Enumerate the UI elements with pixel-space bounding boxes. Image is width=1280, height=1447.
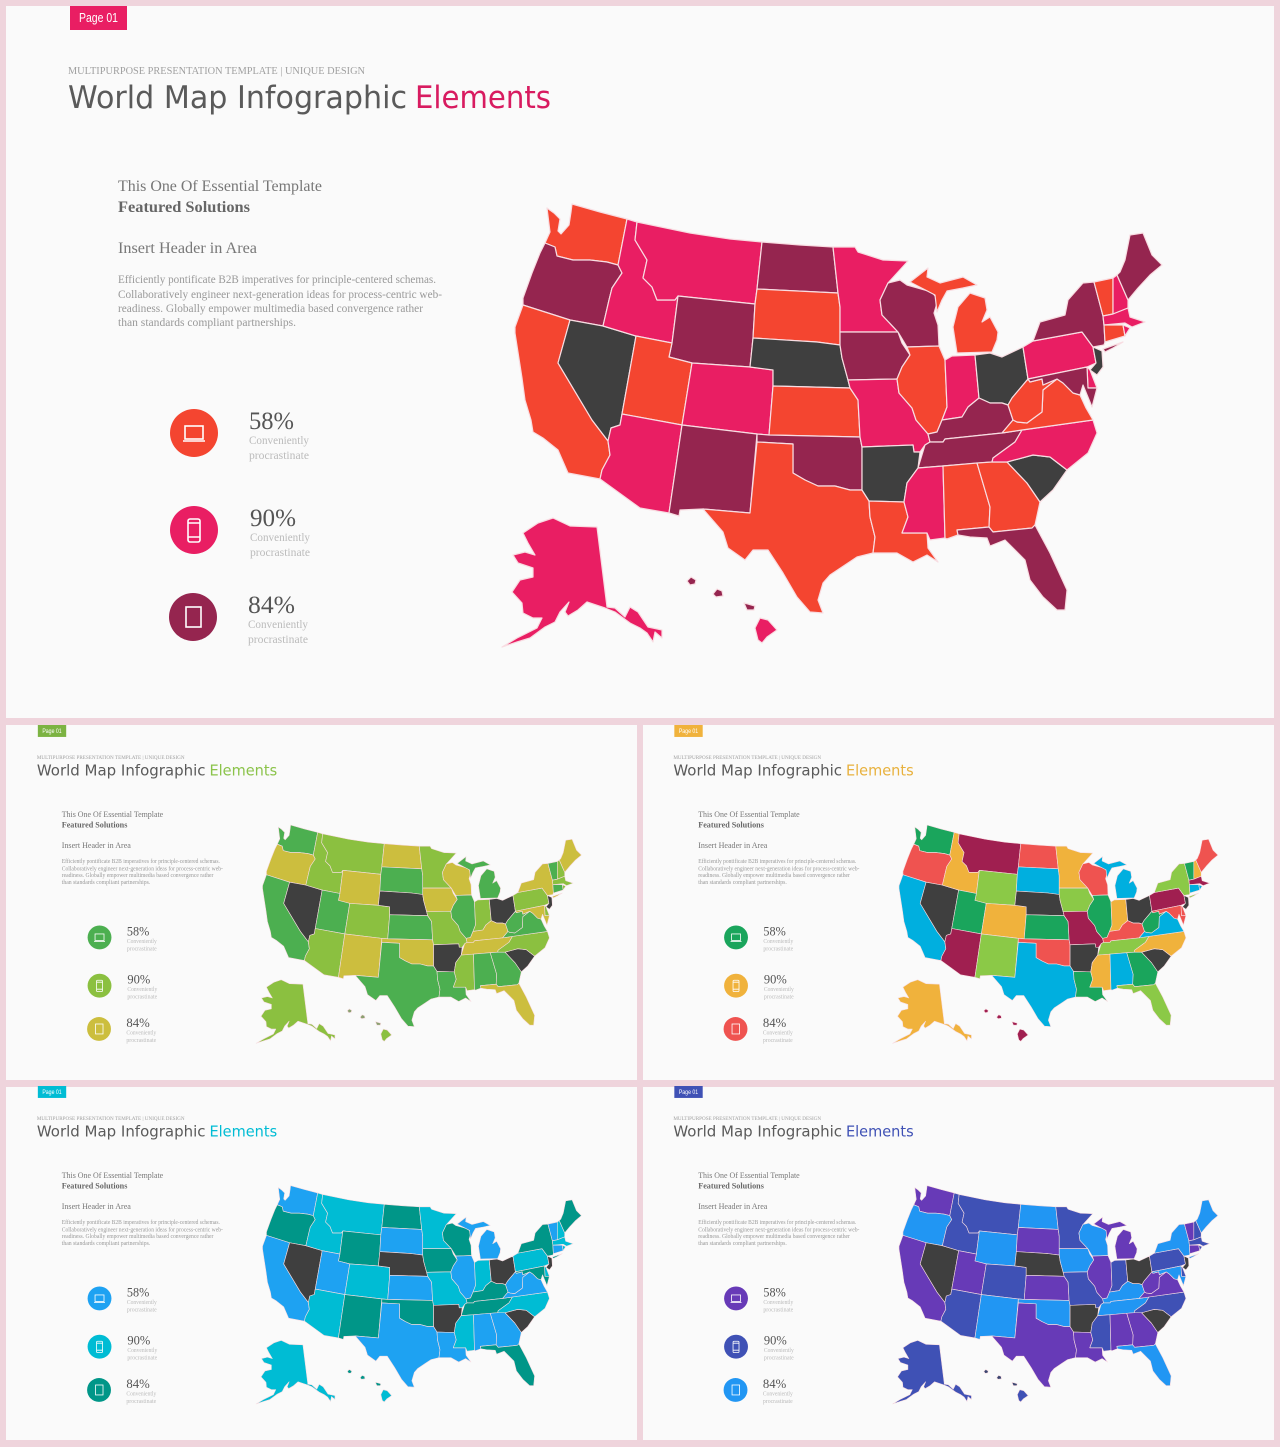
stat: 58% laptop: procrastinate [127,946,157,952]
page tag [674,1086,703,1098]
stat: 84% tablet [87,1377,157,1405]
title: World Map Infographic [37,762,205,780]
intro text: Featured Solutions [698,1181,764,1190]
paragraph: Collaboratively engineer next-generation ideas for process-centric web- [62,1226,223,1233]
stat: 58% laptop: procrastinate [763,1307,794,1313]
eyebrow: MULTIPURPOSE PRESENTATION TEMPLATE | UNIQUE DESIGN [68,65,365,77]
eyebrow: MULTIPURPOSE PRESENTATION TEMPLATE | UNIQUE DESIGN [37,755,185,761]
page tag: Page 01 [42,1089,62,1096]
paragraph: Collaboratively engineer next-generation ideas for process-centric web- [118,289,442,301]
stat: 58% laptop: Conveniently [763,939,793,945]
stat: 84% tablet [87,1016,157,1044]
paragraph [698,1219,860,1247]
stat: 84% tablet: Conveniently [248,619,308,631]
stat: 58% laptop [724,1285,794,1313]
stat: 58% laptop: 58% [127,1285,149,1299]
eyebrow: MULTIPURPOSE PRESENTATION TEMPLATE | UNIQUE DESIGN [673,755,821,761]
stat: 58% laptop: 58% [763,924,786,938]
page tag [38,725,66,737]
paragraph [62,858,223,886]
intro text: Insert Header in Area [698,841,768,850]
title: World Map Infographic [68,80,407,116]
stat: 90% phone [170,505,310,559]
intro text: Insert Header in Area [698,1202,768,1211]
title: World Map Infographic [673,762,842,780]
paragraph: Collaboratively engineer next-generation ideas for process-centric web- [62,865,223,872]
stat: 90% phone: procrastinate [764,995,794,1001]
stat: 90% phone: procrastinate [764,1356,794,1362]
stat: 84% tablet: procrastinate [126,1038,157,1044]
paragraph: than standards compliant partnerships. [698,880,787,886]
paragraph: than standards compliant partnerships. [118,317,296,329]
map: USA violet [893,1186,1218,1404]
stat: 58% laptop: Conveniently [127,1300,157,1306]
stat: 90% phone [88,973,158,1001]
eyebrow: MULTIPURPOSE PRESENTATION TEMPLATE | UNIQUE DESIGN [673,1116,821,1122]
paragraph [62,1219,223,1247]
stat: 58% laptop [170,408,309,462]
stat: 84% tablet: procrastinate [763,1399,793,1405]
stat: 58% laptop: Conveniently [763,1300,793,1306]
title: Elements [846,762,914,780]
stat: 58% laptop: 58% [249,408,294,435]
stat: 90% phone: Conveniently [250,532,310,544]
stat: 90% phone: procrastinate [250,547,310,559]
panel: green slide background [6,725,637,1080]
paragraph: Collaboratively engineer next-generation ideas for process-centric web- [698,1226,860,1233]
intro text: Featured Solutions [698,820,764,829]
panel: teal slide background [6,1087,637,1440]
stat: 84% tablet [724,1377,793,1405]
slide content: multicolour [673,725,914,1044]
slide content: pink [68,6,551,646]
intro text: Featured Solutions [62,1181,127,1190]
page tag [674,725,703,737]
stat: 58% laptop [88,924,157,952]
slide content: teal [37,1086,277,1405]
stat: 58% laptop [724,924,794,952]
paragraph: readiness. Globally empower multimedia based convergence rather [698,873,850,879]
intro text: This One Of Essential Template [62,810,164,819]
title: Elements [415,80,551,116]
paragraph: Efficiently pontificate B2B imperatives for principle-centered schemas. [698,858,857,865]
page tag [38,1086,66,1098]
stat: 58% laptop: procrastinate [763,946,794,952]
stat: 90% phone: 90% [127,1334,150,1348]
stat: 84% tablet: procrastinate [763,1038,793,1044]
paragraph: Collaboratively engineer next-generation ideas for process-centric web- [698,865,860,872]
stat: 84% tablet: Conveniently [126,1030,156,1036]
stat: 58% laptop: procrastinate [127,1307,157,1313]
paragraph: Efficiently pontificate B2B imperatives for principle-centered schemas. [118,274,436,286]
map: USA multicolour [893,825,1218,1043]
page tag: Page 01 [79,11,118,25]
slide content: violet [673,1086,914,1405]
intro text [698,810,800,850]
stat: 84% tablet [169,592,308,646]
intro text: This One Of Essential Template [698,1171,800,1180]
paragraph: than standards compliant partnerships. [62,880,151,886]
intro text [62,810,164,850]
eyebrow: MULTIPURPOSE PRESENTATION TEMPLATE | UNIQUE DESIGN [37,1116,185,1122]
stat: 84% tablet: procrastinate [248,634,308,646]
paragraph: than standards compliant partnerships. [62,1241,151,1247]
paragraph [698,858,860,886]
map: USA teal [256,1186,581,1404]
stat: 90% phone: 90% [764,973,787,987]
intro text: This One Of Essential Template [62,1171,164,1180]
intro text [118,178,322,257]
title: World Map Infographic [37,1123,205,1141]
stat: 90% phone: 90% [764,1334,787,1348]
stat: 58% laptop [88,1285,157,1313]
title: Elements [209,762,277,780]
stat: 84% tablet: 84% [126,1377,150,1391]
slide content: green [37,725,277,1044]
intro text: This One Of Essential Template [698,810,800,819]
paragraph [118,274,442,329]
panel: pink slide background [6,6,1274,718]
intro text: Insert Header in Area [62,1202,131,1211]
stat: 90% phone [724,1334,794,1362]
stat: 90% phone: Conveniently [127,987,157,993]
paragraph: Efficiently pontificate B2B imperatives for principle-centered schemas. [698,1219,857,1226]
paragraph: Efficiently pontificate B2B imperatives for principle-centered schemas. [62,858,220,865]
stat: 58% laptop: 58% [127,924,149,938]
title: World Map Infographic [673,1123,842,1141]
paragraph: than standards compliant partnerships. [698,1241,787,1247]
paragraph: readiness. Globally empower multimedia based convergence rather [62,1234,214,1240]
stat: 90% phone: Conveniently [764,987,794,993]
intro text: Insert Header in Area [62,841,131,850]
stat: 58% laptop: 58% [763,1285,786,1299]
intro text [698,1171,800,1211]
intro text: Insert Header in Area [118,240,257,257]
stat: 84% tablet: 84% [763,1377,786,1391]
stat: 90% phone: procrastinate [127,995,158,1001]
stat: 84% tablet: Conveniently [763,1391,793,1397]
paragraph: readiness. Globally empower multimedia based convergence rather [698,1234,850,1240]
stat: 90% phone: procrastinate [127,1356,158,1362]
stat: 58% laptop: Conveniently [249,435,309,447]
stat: 84% tablet: Conveniently [763,1030,793,1036]
stat: 84% tablet: 84% [763,1016,786,1030]
stat: 84% tablet: Conveniently [126,1391,156,1397]
stat: 90% phone: 90% [127,973,150,987]
intro text: Featured Solutions [62,820,127,829]
intro text: Featured Solutions [118,199,250,216]
paragraph: readiness. Globally empower multimedia based convergence rather [118,303,423,315]
stat: 90% phone: Conveniently [764,1348,794,1354]
map: USA pink [502,204,1162,647]
stat: 90% phone: Conveniently [127,1348,157,1354]
stat: 90% phone [88,1334,158,1362]
intro text: This One Of Essential Template [118,178,322,195]
page tag: Page 01 [42,728,62,735]
page tag [70,6,127,30]
stat: 84% tablet [724,1016,793,1044]
paragraph: Efficiently pontificate B2B imperatives for principle-centered schemas. [62,1219,220,1226]
stat: 84% tablet: 84% [248,592,295,619]
stat: 58% laptop: procrastinate [249,450,309,462]
page tag: Page 01 [679,1089,699,1096]
stat: 58% laptop: Conveniently [127,939,157,945]
intro text [62,1171,164,1211]
panel: multicolour slide background [643,725,1274,1080]
map: USA green [256,825,581,1043]
stat: 84% tablet: 84% [126,1016,150,1030]
title: Elements [209,1123,277,1141]
stat: 90% phone [724,973,794,1001]
stat: 84% tablet: procrastinate [126,1399,157,1405]
paragraph: readiness. Globally empower multimedia based convergence rather [62,873,214,879]
stat: 90% phone: 90% [250,505,296,532]
page tag: Page 01 [679,728,699,735]
title: Elements [846,1123,914,1141]
panel: violet slide background [643,1087,1274,1440]
